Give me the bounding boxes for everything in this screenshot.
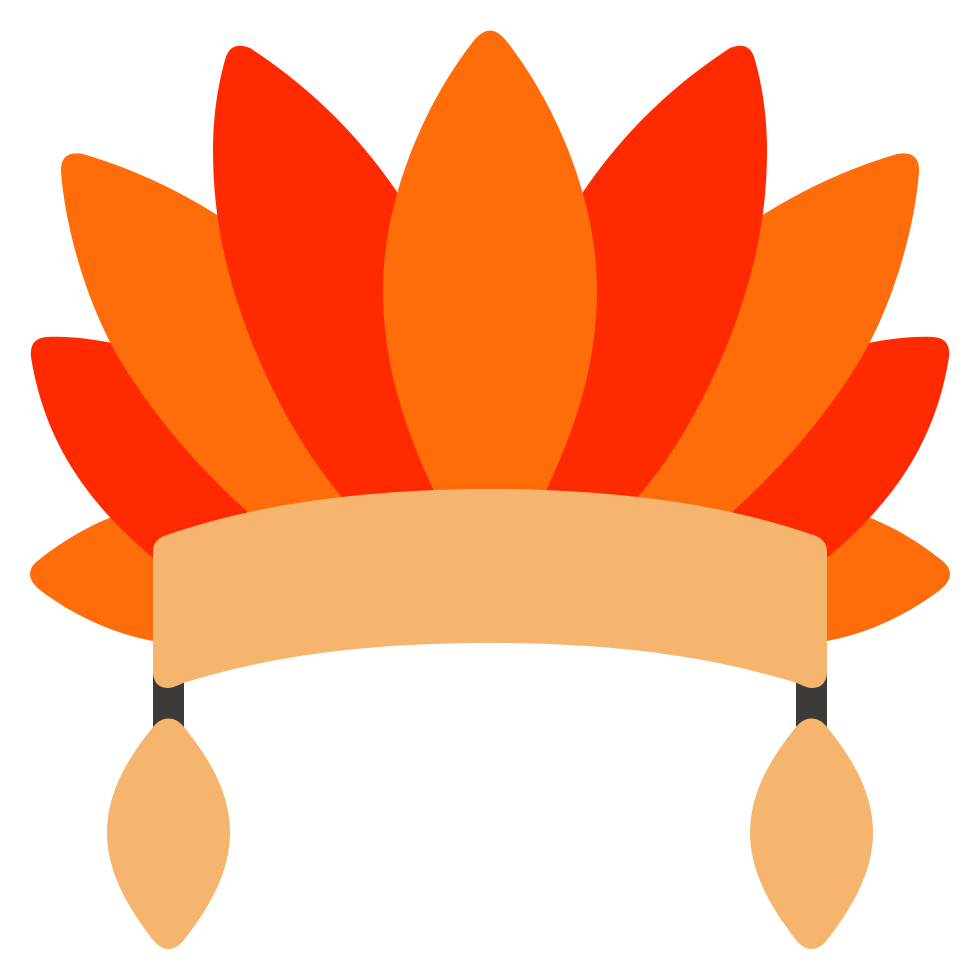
left bead [107,718,230,949]
headband [153,489,827,688]
red outer feather left [31,337,270,572]
red inner feather right [530,46,767,530]
red inner feather left [213,46,450,530]
orange feather left [61,153,360,530]
right bead [750,718,873,949]
center feather [383,30,597,520]
right string [796,668,827,732]
red outer feather right [710,337,949,572]
left string [153,668,184,732]
orange feather right [620,153,919,530]
lower side feather right [815,505,950,641]
lower side feather left [30,505,165,641]
